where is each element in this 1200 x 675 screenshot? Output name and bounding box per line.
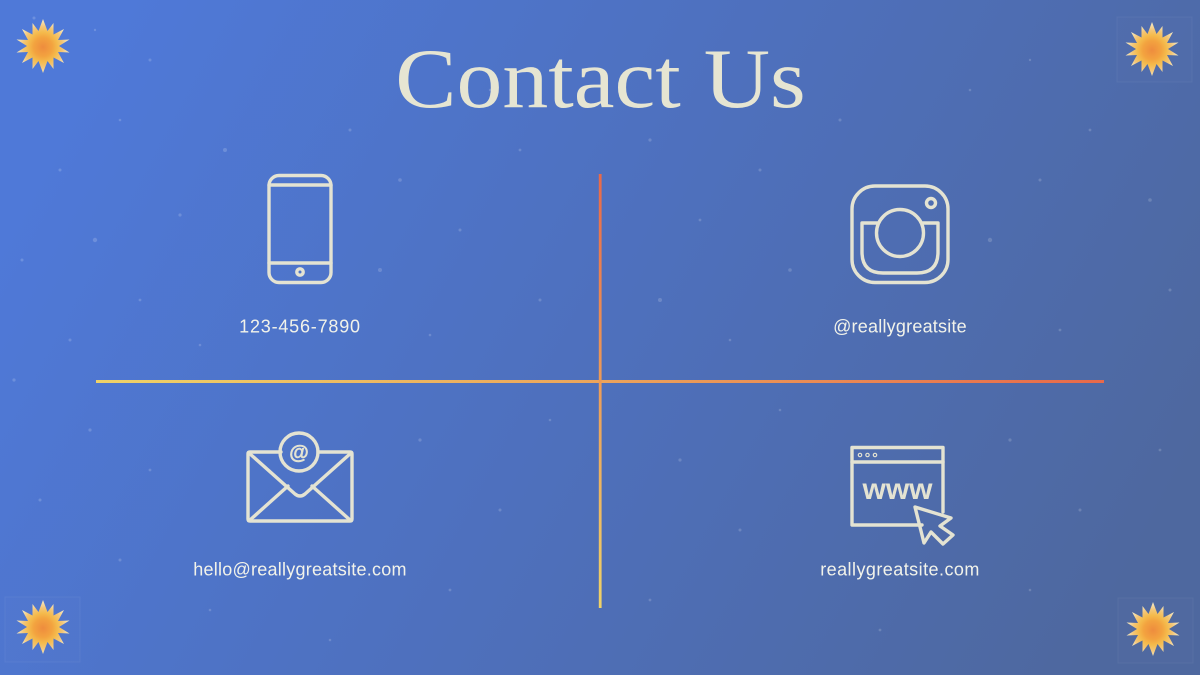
corner star: top right [1117,17,1192,82]
contact item: email [193,433,407,580]
contact item: instagram [833,186,967,336]
corner star: top left [16,19,70,73]
icon: phone [269,176,331,282]
icon: envelope [248,433,352,521]
contact item: website [820,448,980,580]
@ sign: @ [289,442,309,464]
horizontal divider [96,380,1104,383]
www: www [861,473,933,506]
vertical divider [599,174,602,608]
contact item: phone [239,176,361,336]
email address: hello@reallygreatsite.com [193,560,407,580]
instagram handle: @reallygreatsite [833,316,967,336]
phone number: 123-456-7890 [239,316,361,336]
icon: browser with cursor [852,448,953,544]
icon: instagram [852,186,948,282]
corner star: bottom left [5,597,80,662]
corner star: bottom right [1118,598,1193,663]
title: Contact Us [395,32,806,126]
website address: reallygreatsite.com [820,560,980,580]
